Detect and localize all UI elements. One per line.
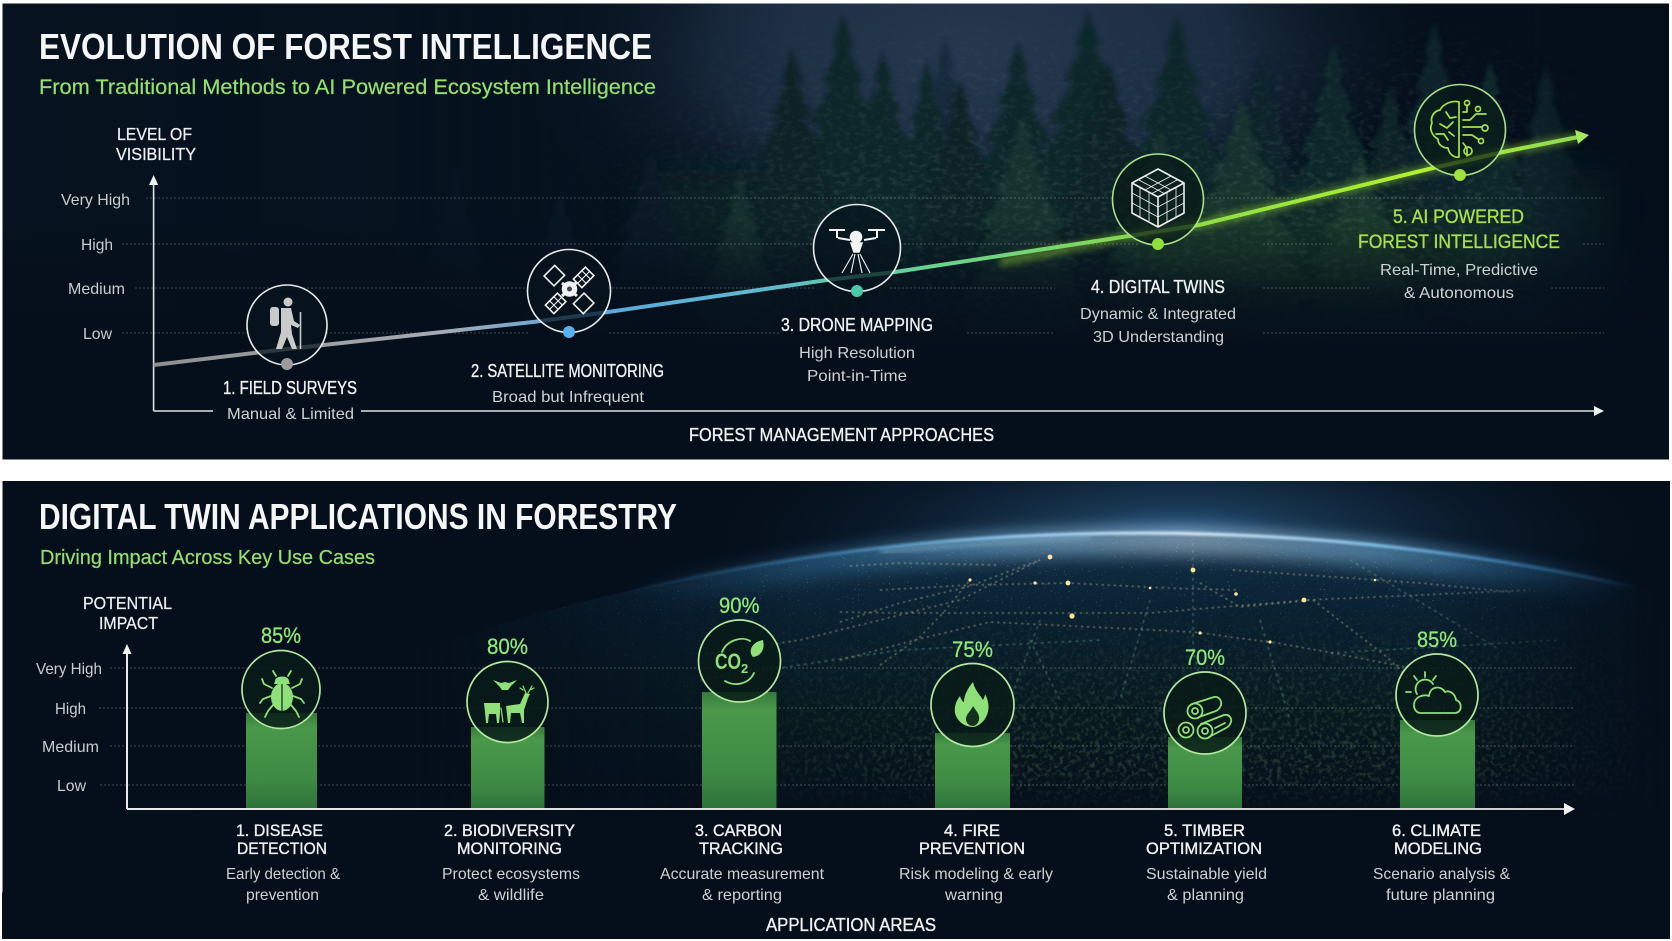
- y axis tick labels: Very High: [61, 192, 130, 209]
- y axis title: IMPACT: [99, 613, 158, 633]
- label: fire prevention: PREVENTION: [919, 839, 1025, 858]
- node: field surveys: [247, 285, 327, 370]
- label: disease detection: Early detection &: [226, 866, 340, 883]
- icon: wildlife: [484, 680, 534, 723]
- y axis tick labels: High: [55, 701, 86, 718]
- bar: climate modeling: 85%: [1417, 627, 1457, 652]
- gridlines: [99, 668, 1575, 785]
- icon: CO2 with leaf: [715, 639, 764, 684]
- gridlines: [122, 198, 1604, 333]
- label: carbon tracking: & reporting: [702, 887, 782, 904]
- label: fire prevention: 4. FIRE: [944, 821, 1000, 840]
- label: climate modeling: 6. CLIMATE: [1392, 821, 1481, 840]
- bar: disease detection: 85%: [261, 623, 301, 648]
- label: carbon tracking: TRACKING: [699, 839, 783, 858]
- icon: CO2 with leaf: CO: [715, 649, 741, 674]
- bar: carbon tracking: 90%: [719, 593, 760, 618]
- label: carbon tracking: 3. CARBON: [695, 821, 782, 840]
- label: disease detection: [226, 821, 340, 904]
- label: digital twins: 4. DIGITAL TWINS: [1091, 277, 1225, 297]
- node: satellite monitoring: [528, 250, 610, 338]
- icon: wireframe cube: [1132, 169, 1184, 227]
- label: disease detection: prevention: [246, 887, 319, 904]
- label: timber optimization: [1146, 821, 1267, 904]
- street lights: warm roads: [700, 560, 1530, 700]
- label: satellite monitoring: Broad but Infrequent: [492, 389, 645, 406]
- bar: carbon tracking: [698, 593, 780, 809]
- label: biodiversity monitoring: & wildlife: [478, 887, 544, 904]
- y axis title: LEVEL OF: [117, 124, 192, 144]
- icon: satellite: [544, 265, 594, 314]
- y axis tick labels: [61, 192, 130, 343]
- label: AI powered forest intelligence: Real-Time, Predictive: [1380, 262, 1538, 279]
- label: fire prevention: Risk modeling & early: [899, 866, 1053, 883]
- label: timber optimization: Sustainable yield: [1146, 866, 1267, 883]
- label: carbon tracking: Accurate measurement: [660, 866, 825, 883]
- label: satellite monitoring: [471, 361, 664, 406]
- icon: AI brain: [1431, 100, 1488, 157]
- main heading: EVOLUTION OF FOREST INTELLIGENCE: [39, 26, 652, 67]
- label: disease detection: DETECTION: [237, 839, 327, 858]
- node: AI powered forest intelligence: [1414, 84, 1506, 181]
- bar: disease detection: [242, 623, 320, 809]
- y axis tick labels: Medium: [42, 739, 99, 756]
- label: digital twins: Dynamic & Integrated: [1080, 306, 1236, 323]
- label: drone mapping: High Resolution: [799, 345, 915, 362]
- land wisp near horizon: [880, 537, 1090, 552]
- icon: hiker: [270, 298, 300, 349]
- label: timber optimization: OPTIMIZATION: [1146, 839, 1262, 858]
- panel: digital twin applications: [2, 481, 1670, 939]
- label: drone mapping: [781, 315, 933, 385]
- label: AI powered forest intelligence: 5. AI POWERED: [1393, 207, 1524, 228]
- panel: evolution of forest intelligence: [2, 3, 1670, 460]
- label: climate modeling: Scenario analysis &: [1373, 866, 1510, 883]
- x axis title: FOREST MANAGEMENT APPROACHES: [689, 425, 994, 445]
- y axis tick labels: [36, 661, 102, 795]
- y axis title: [84, 596, 172, 630]
- label: biodiversity monitoring: MONITORING: [457, 839, 562, 858]
- y axis tick labels: Very High: [36, 661, 102, 678]
- earth at night background: [2, 481, 1670, 939]
- label: digital twins: 3D Understanding: [1093, 329, 1224, 346]
- icon: drone: [829, 230, 885, 273]
- label: biodiversity monitoring: Protect ecosystems: [442, 866, 580, 883]
- bar: fire prevention: [931, 637, 1014, 809]
- y axis tick labels: Medium: [68, 281, 125, 298]
- icon: sun and cloud: [1406, 672, 1461, 713]
- bar: fire prevention: 75%: [952, 637, 993, 662]
- label: drone mapping: 3. DRONE MAPPING: [781, 315, 933, 335]
- y axis tick labels: Low: [57, 778, 86, 795]
- axes: [122, 644, 1575, 815]
- forest background: [2, 3, 1670, 460]
- label: AI powered forest intelligence: FOREST INTELLIGENCE: [1358, 232, 1560, 253]
- street lights: cool and green roads: [700, 543, 1560, 720]
- label: fire prevention: [899, 821, 1053, 904]
- label: field surveys: Manual & Limited: [227, 406, 354, 423]
- trend line: [154, 130, 1589, 365]
- label: satellite monitoring: 2. SATELLITE MONITORING: [471, 361, 664, 381]
- subtitle: Driving Impact Across Key Use Cases: [40, 547, 375, 569]
- bar: timber optimization: [1164, 645, 1246, 809]
- bright city clusters: [968, 555, 1376, 644]
- y axis title: [116, 128, 196, 160]
- main heading: DIGITAL TWIN APPLICATIONS IN FORESTRY: [39, 496, 677, 537]
- label: timber optimization: & planning: [1167, 887, 1244, 904]
- label: biodiversity monitoring: 2. BIODIVERSITY: [444, 821, 575, 840]
- subtitle: From Traditional Methods to AI Powered Ecosystem Intelligence: [39, 76, 656, 99]
- label: timber optimization: 5. TIMBER: [1164, 821, 1245, 840]
- label: fire prevention: warning: [944, 887, 1003, 904]
- y axis tick labels: High: [81, 237, 113, 254]
- label: digital twins: [1080, 277, 1236, 346]
- y axis title: POTENTIAL: [83, 593, 172, 613]
- label: field surveys: 1. FIELD SURVEYS: [223, 378, 357, 398]
- label: carbon tracking: [660, 821, 825, 904]
- icon: CO2 with leaf: 2: [741, 661, 748, 676]
- icon: beetle: [260, 671, 304, 717]
- y axis tick labels: Low: [83, 326, 112, 343]
- icon: flame: [955, 682, 989, 727]
- x axis title: APPLICATION AREAS: [766, 915, 936, 935]
- label: climate modeling: MODELING: [1394, 839, 1482, 858]
- axes: [149, 175, 1604, 416]
- bar: timber optimization: 70%: [1185, 645, 1225, 670]
- label: disease detection: 1. DISEASE: [236, 821, 323, 840]
- label: climate modeling: future planning: [1386, 887, 1495, 904]
- bar: biodiversity monitoring: 80%: [487, 634, 528, 659]
- label: drone mapping: Point-in-Time: [807, 368, 907, 385]
- label: climate modeling: [1373, 821, 1510, 904]
- label: AI powered forest intelligence: [1358, 207, 1560, 302]
- bar: climate modeling: [1396, 627, 1478, 809]
- label: AI powered forest intelligence: & Autonomous: [1404, 285, 1514, 302]
- label: biodiversity monitoring: [442, 821, 580, 904]
- y axis title: VISIBILITY: [116, 144, 196, 164]
- node: drone mapping: [814, 204, 900, 297]
- bar: biodiversity monitoring: [467, 634, 548, 809]
- icon: timber logs: [1178, 697, 1231, 738]
- label: field surveys: [224, 380, 356, 419]
- node: digital twins: [1112, 154, 1204, 250]
